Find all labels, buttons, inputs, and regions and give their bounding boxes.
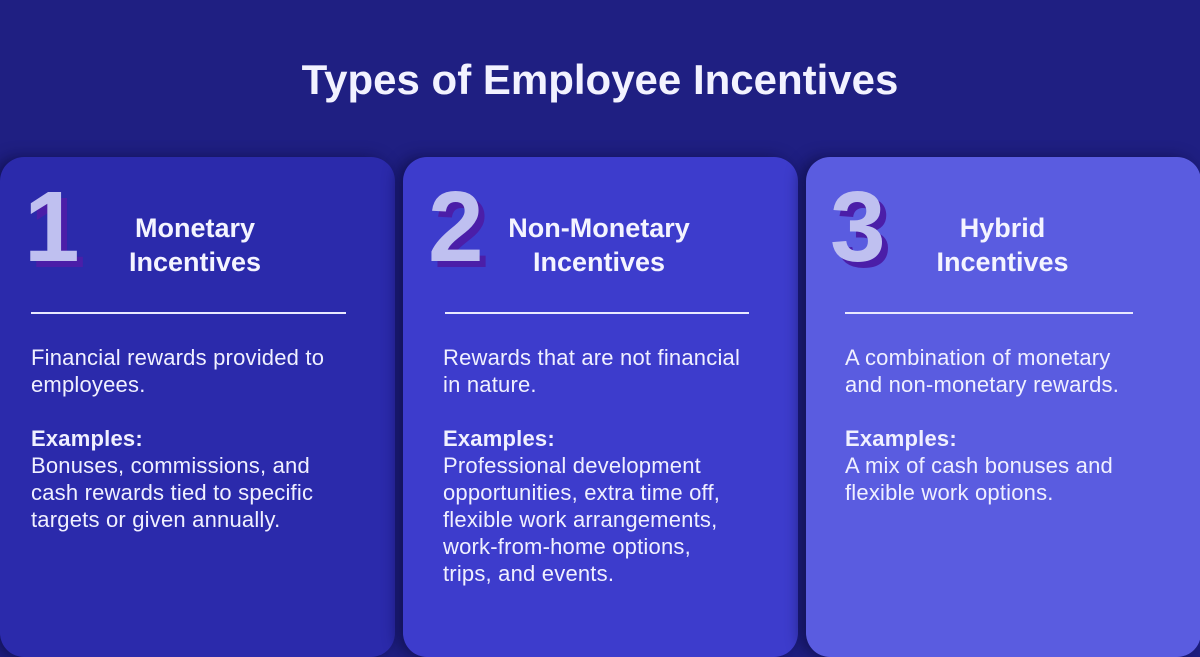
heading 1 <box>129 213 261 277</box>
panel: hybrid <box>806 157 1200 657</box>
heading 2 <box>508 213 690 277</box>
panel: non-monetary <box>403 157 798 657</box>
text 2: in nature. Professional development <box>443 372 701 478</box>
text 1: Examples: <box>31 426 143 451</box>
text 2: trips, and events. <box>443 561 614 586</box>
text 2: opportunities, extra time off, <box>443 480 720 505</box>
text 2: work-from-home options, <box>443 534 691 559</box>
text 2: Rewards that are not financial <box>443 345 740 370</box>
text 3: Examples: <box>845 426 957 451</box>
heading 2: Incentives <box>533 247 665 277</box>
text 2: Examples: <box>443 426 555 451</box>
heading 1: Monetary <box>135 213 255 243</box>
heading 3: Hybrid <box>960 213 1045 243</box>
text 1: Financial rewards provided to employees. Bonuses, commissions, and cash rewards tied to specific targets or given annually. <box>31 345 324 532</box>
text 2 <box>443 345 740 586</box>
heading 3 <box>936 213 1069 277</box>
heading 3: Incentives <box>936 247 1069 277</box>
text 3: A combination of monetary and non-monetary rewards. A mix of cash bonuses and flexible work options. <box>845 345 1119 505</box>
number 3: 3 <box>830 171 886 283</box>
heading 2: Non-Monetary <box>508 213 690 243</box>
number 1: 1 <box>24 171 80 283</box>
panel: monetary <box>0 157 395 657</box>
title: Types of Employee Incentives <box>302 56 898 103</box>
text 2: flexible work arrangements, <box>443 507 717 532</box>
number 2: 2 <box>428 171 484 283</box>
heading 1: Incentives <box>129 247 261 277</box>
